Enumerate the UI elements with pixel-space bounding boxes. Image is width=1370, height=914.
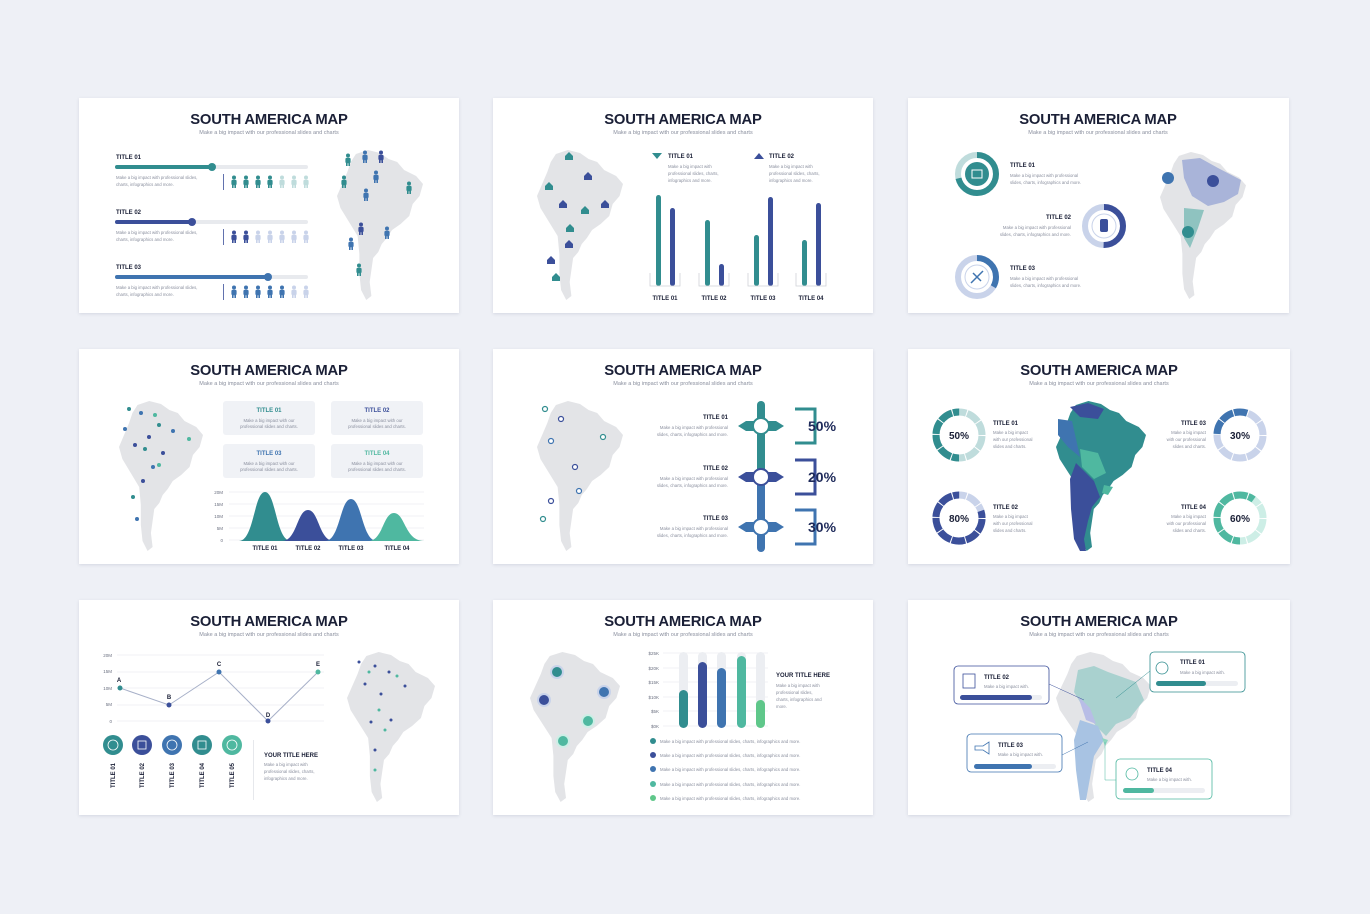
box 1: Make a big impact with our	[243, 418, 295, 423]
left texts	[657, 415, 729, 538]
donut 50: with our professional	[993, 437, 1032, 442]
line chart: 20M	[103, 653, 112, 658]
title: SOUTH AMERICA MAP	[604, 112, 762, 128]
box 2	[331, 401, 423, 435]
slide 4: humps	[79, 349, 459, 564]
slide 9: callouts: Make a big impact with our professional slides and charts	[1029, 632, 1169, 638]
slide 6: colored map with donuts	[908, 349, 1290, 564]
box 3: TITLE 03	[256, 451, 282, 457]
item 2: Make a big impact with professional	[1003, 225, 1071, 230]
callout title 04: TITLE 04	[1147, 768, 1173, 774]
donut 80: TITLE 02	[993, 505, 1019, 511]
box 1	[223, 401, 315, 435]
legend: infographics and more.	[769, 178, 813, 183]
hump chart: 20M	[214, 490, 223, 495]
item 2: TITLE 02	[1046, 215, 1072, 221]
slide 3: donut icons: Make a big impact with our professional slides and charts	[1028, 130, 1168, 136]
your title text: YOUR TITLE HERE	[264, 753, 318, 759]
bar chart: $0K	[651, 724, 659, 729]
box 4: professional slides and charts.	[348, 467, 406, 472]
your title text: professional slides, charts,	[264, 769, 315, 774]
donut 50: slides and charts.	[993, 444, 1026, 449]
donut 60: slides and charts.	[1173, 528, 1206, 533]
box 2: TITLE 02	[364, 408, 390, 414]
your title text: professional slides,	[776, 690, 813, 695]
legend: TITLE 01	[668, 154, 694, 160]
hump chart: TITLE 02	[295, 546, 321, 552]
icon row: TITLE 01	[111, 762, 117, 788]
callout title 02: Make a big impact with.	[984, 684, 1029, 689]
icon row: TITLE 04	[200, 762, 206, 788]
row 3: TITLE 03	[116, 265, 142, 271]
your title text: more.	[776, 704, 787, 709]
callout title 01	[1116, 652, 1245, 698]
donut 60: with our professional	[1167, 521, 1206, 526]
title: SOUTH AMERICA MAP	[190, 112, 348, 128]
callout title 01: TITLE 01	[1180, 660, 1206, 666]
slide 1: people progress: Make a big impact with our professional slides and charts	[199, 130, 339, 136]
hump chart: 5M	[217, 526, 223, 531]
your title text: Make a big impact with	[776, 683, 820, 688]
title: SOUTH AMERICA MAP	[190, 363, 348, 379]
slide 7: line chart: Make a big impact with our professional slides and charts	[199, 632, 339, 638]
box 1: professional slides and charts.	[240, 424, 298, 429]
icon row: TITLE 05	[230, 762, 236, 788]
title: SOUTH AMERICA MAP	[1020, 614, 1178, 630]
title: SOUTH AMERICA MAP	[604, 363, 762, 379]
legend list: Make a big impact with professional slides, charts, infographics and more.	[660, 739, 800, 744]
callout title 02: TITLE 02	[984, 675, 1010, 681]
hump chart: 10M	[214, 514, 223, 519]
legend: professional slides, charts,	[769, 171, 820, 176]
slide 8: bar chart with legend: Make a big impact with our professional slides and charts	[613, 632, 753, 638]
item 2	[1000, 207, 1123, 245]
left texts: Make a big impact with professional	[660, 425, 728, 430]
donut 60: Make a big impact	[1171, 514, 1207, 519]
line chart: 15M	[103, 669, 112, 674]
line chart: 10M	[103, 686, 112, 691]
donut 30: with our professional	[1167, 437, 1206, 442]
donut 50	[936, 412, 1032, 458]
hump chart: 0	[220, 538, 223, 543]
bars: TITLE 01	[652, 296, 678, 302]
row 2: charts, infographics and more.	[116, 237, 174, 242]
left texts: slides, charts, infographics and more.	[657, 432, 728, 437]
legend: Make a big impact with	[668, 164, 712, 169]
donut 50: TITLE 01	[993, 421, 1019, 427]
item 3: slides, charts, infographics and more.	[1010, 283, 1081, 288]
percentages: 30%	[808, 519, 837, 535]
title: SOUTH AMERICA MAP	[1019, 112, 1177, 128]
row 3	[115, 265, 309, 300]
row 1: charts, infographics and more.	[116, 182, 174, 187]
bar chart: $20K	[648, 666, 659, 671]
donut 60: TITLE 04	[1181, 505, 1207, 511]
your title text: Make a big impact with	[264, 762, 308, 767]
line chart: D	[266, 713, 271, 719]
callout title 03: TITLE 03	[998, 743, 1024, 749]
title: SOUTH AMERICA MAP	[604, 614, 762, 630]
bars	[650, 195, 826, 302]
your title text: YOUR TITLE HERE	[776, 673, 830, 679]
legend list: Make a big impact with professional slides, charts, infographics and more.	[660, 753, 800, 758]
center bar	[738, 401, 784, 552]
callout title 03	[967, 734, 1088, 772]
line chart: C	[217, 662, 222, 668]
your title text: infographics and more.	[264, 776, 308, 781]
your title text	[776, 673, 830, 709]
bar chart	[648, 651, 768, 729]
donut 80: 80%	[949, 514, 969, 525]
callout title 04: Make a big impact with.	[1147, 777, 1192, 782]
map with rings	[537, 401, 623, 551]
slide 1: people progress	[79, 98, 459, 313]
donut 80: Make a big impact	[993, 514, 1029, 519]
item 3	[958, 258, 1081, 296]
legend list: Make a big impact with professional slides, charts, infographics and more.	[660, 767, 800, 772]
line chart	[103, 653, 324, 724]
percentages	[795, 409, 837, 544]
percentages: 20%	[808, 469, 837, 485]
item 3: TITLE 03	[1010, 266, 1036, 272]
callout title 01: Make a big impact with.	[1180, 670, 1225, 675]
donut 30: Make a big impact	[1171, 430, 1207, 435]
donut 80: with our professional	[993, 521, 1032, 526]
map	[1056, 652, 1151, 802]
bars: TITLE 02	[701, 296, 727, 302]
row 1: TITLE 01	[116, 155, 142, 161]
item 1: slides, charts, infographics and more.	[1010, 180, 1081, 185]
box 2: Make a big impact with our	[351, 418, 403, 423]
callout title 04	[1105, 742, 1212, 799]
slide 5: vertical timeline	[493, 349, 873, 564]
line chart: A	[117, 678, 122, 684]
legend	[652, 153, 820, 183]
donut 30: TITLE 03	[1181, 421, 1207, 427]
your title text	[253, 740, 318, 800]
callout title 02	[954, 666, 1084, 704]
slide 2: bar chart with map	[493, 98, 873, 313]
left texts: TITLE 02	[703, 466, 729, 472]
item 1	[958, 155, 1081, 193]
hump chart: 15M	[214, 502, 223, 507]
slide 3: donut icons	[908, 98, 1289, 313]
map with people	[337, 150, 423, 300]
item 1: TITLE 01	[1010, 163, 1036, 169]
slide 4: humps: Make a big impact with our professional slides and charts	[199, 381, 339, 387]
your title text: charts, infographics and	[776, 697, 822, 702]
legend: infographics and more.	[668, 178, 712, 183]
icon row: TITLE 02	[140, 762, 146, 788]
legend list: Make a big impact with professional slides, charts, infographics and more.	[660, 796, 800, 801]
row 1: Make a big impact with professional slides,	[116, 175, 197, 180]
legend: professional slides, charts,	[668, 171, 719, 176]
box 4	[331, 444, 423, 478]
row 1	[115, 155, 309, 190]
donut 50: Make a big impact	[993, 430, 1029, 435]
bars: TITLE 03	[750, 296, 776, 302]
box 4: Make a big impact with our	[351, 461, 403, 466]
donut 60	[1167, 495, 1263, 541]
left texts: Make a big impact with professional	[660, 476, 728, 481]
map with pins	[1160, 152, 1246, 299]
box 1: TITLE 01	[256, 408, 282, 414]
left texts: slides, charts, infographics and more.	[657, 533, 728, 538]
title: SOUTH AMERICA MAP	[1020, 363, 1178, 379]
row 3: charts, infographics and more.	[116, 292, 174, 297]
icon row	[103, 735, 242, 788]
box 4: TITLE 04	[364, 451, 390, 457]
donut 30	[1167, 412, 1263, 458]
donut 50: 50%	[949, 431, 969, 442]
donut 80	[930, 489, 1032, 547]
slide 5: vertical timeline: Make a big impact with our professional slides and charts	[613, 381, 753, 387]
legend: Make a big impact with	[769, 164, 813, 169]
left texts: Make a big impact with professional	[660, 526, 728, 531]
bars: TITLE 04	[798, 296, 824, 302]
left texts: slides, charts, infographics and more.	[657, 483, 728, 488]
map with dots	[119, 401, 203, 551]
item 2: slides, charts, infographics and more.	[1000, 232, 1071, 237]
hump chart	[214, 490, 424, 552]
percentages: 50%	[808, 418, 837, 434]
callout title 03: Make a big impact with.	[998, 752, 1043, 757]
hump chart: TITLE 03	[338, 546, 364, 552]
hump chart: TITLE 04	[384, 546, 410, 552]
donut 60: 60%	[1230, 514, 1250, 525]
icon row: TITLE 03	[170, 762, 176, 788]
slide 7: line chart	[79, 600, 459, 815]
row 2: TITLE 02	[116, 210, 142, 216]
map colored	[1056, 401, 1146, 551]
legend list: Make a big impact with professional slides, charts, infographics and more.	[660, 782, 800, 787]
line chart: E	[316, 662, 320, 668]
slide 6: colored map with donuts: Make a big impact with our professional slides and charts	[1029, 381, 1169, 387]
bar chart: $10K	[648, 695, 659, 700]
slide 8: bar chart with legend	[493, 600, 873, 815]
box 3: professional slides and charts.	[240, 467, 298, 472]
line chart: 5M	[106, 702, 112, 707]
donut 80: slides and charts.	[993, 528, 1026, 533]
item 3: Make a big impact with professional	[1010, 276, 1078, 281]
hump chart: TITLE 01	[252, 546, 278, 552]
box 3	[223, 444, 315, 478]
line chart: B	[167, 695, 172, 701]
bar chart: $5K	[651, 709, 659, 714]
bar chart: $15K	[648, 680, 659, 685]
box 2: professional slides and charts.	[348, 424, 406, 429]
legend list	[650, 738, 800, 801]
slide 2: bar chart with map: Make a big impact with our professional slides and charts	[613, 130, 753, 136]
bar chart: $25K	[648, 651, 659, 656]
map with pins	[530, 652, 620, 802]
donut 30: slides and charts.	[1173, 444, 1206, 449]
line chart: 0	[109, 719, 112, 724]
map with arrows	[537, 150, 623, 300]
left texts: TITLE 03	[703, 516, 729, 522]
item 1: Make a big impact with professional	[1010, 173, 1078, 178]
title: SOUTH AMERICA MAP	[190, 614, 348, 630]
map dots	[347, 652, 435, 802]
row 2: Make a big impact with professional slides,	[116, 230, 197, 235]
donut 30: 30%	[1230, 431, 1250, 442]
row 3: Make a big impact with professional slides,	[116, 285, 197, 290]
left texts: TITLE 01	[703, 415, 729, 421]
row 2	[115, 210, 309, 245]
box 3: Make a big impact with our	[243, 461, 295, 466]
slide 9: callouts	[908, 600, 1290, 815]
legend: TITLE 02	[769, 154, 795, 160]
